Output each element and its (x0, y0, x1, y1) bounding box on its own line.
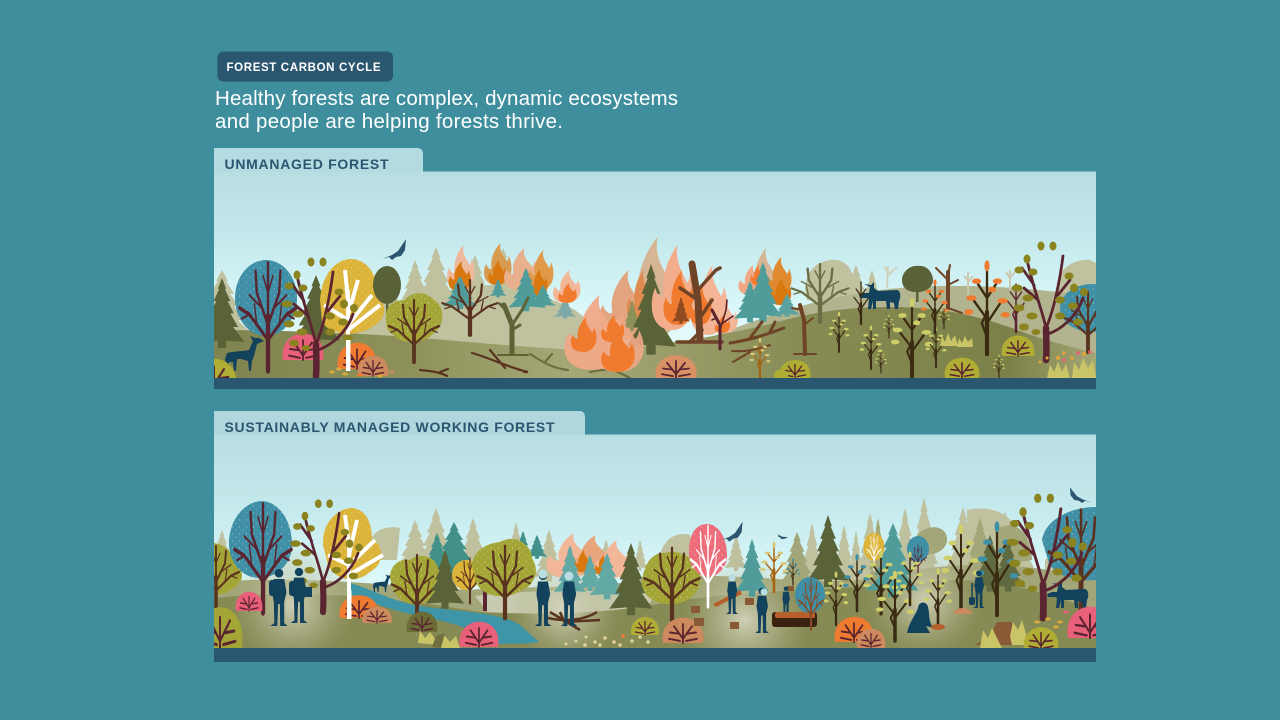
maroon trunk (483, 590, 487, 611)
right leafy tree (1007, 494, 1087, 618)
pink shrub right (1067, 607, 1113, 638)
moose (859, 282, 900, 309)
tab: unmanaged forest: UNMANAGED FOREST (224, 156, 389, 172)
log pile and worker (772, 586, 817, 627)
brown shrub (663, 618, 703, 643)
distant pale trees and blobs (209, 497, 1096, 593)
pale distant dead trees (884, 266, 1015, 295)
moose (1047, 581, 1088, 608)
fallen logs right of fire (730, 322, 784, 362)
sky (214, 434, 1096, 648)
far teal conifers (421, 522, 547, 577)
distant pale conifers (214, 247, 1096, 330)
grass tufts (940, 333, 973, 347)
teal big conifer (867, 523, 919, 597)
mid-tone hills and conifers (214, 518, 1096, 648)
badge: forest carbon cycle (218, 52, 393, 82)
flames and burning trees left (442, 243, 556, 311)
right leafy tree (1012, 242, 1088, 360)
ground bar (214, 378, 1096, 389)
lower shrubs (656, 336, 1034, 378)
birch trunk front (346, 340, 350, 371)
olive shrub (631, 617, 659, 635)
small flaming tree center (553, 270, 580, 319)
left shrub (214, 358, 236, 378)
small sapling (786, 558, 800, 585)
deer (225, 336, 264, 371)
birch trunk front (347, 590, 352, 619)
pink shrub front (460, 622, 498, 647)
controlled burn flames (546, 533, 631, 599)
background conifer under trees (297, 275, 340, 342)
olive tree center (642, 548, 700, 620)
sky (214, 172, 1096, 346)
ground bar (214, 648, 1096, 662)
slash pile (548, 612, 600, 630)
planter kneeling (907, 603, 945, 633)
burned tree (677, 264, 722, 342)
foreground ground (214, 580, 1096, 648)
heading text: Healthy forests are complex, dynamic ecosystems (215, 87, 678, 110)
mound and man with shovel (953, 571, 985, 614)
yellow birch tree (323, 508, 383, 619)
planted saplings (824, 521, 1018, 641)
bird (1070, 487, 1091, 503)
flowers and grass bottom right (1038, 350, 1096, 378)
flowers on ground (564, 634, 650, 647)
river (350, 583, 539, 644)
olive tree (386, 293, 442, 362)
worker with tablet (755, 588, 769, 633)
dark olive conifer right (807, 515, 849, 587)
heading text: and people are helping forests thrive. (215, 110, 563, 133)
dark conifer left (214, 278, 244, 348)
right blue tree (1042, 507, 1113, 610)
small deer across the river (373, 574, 392, 592)
blue tree (229, 501, 292, 612)
dark olive conifer (609, 543, 653, 615)
orange shrubs (338, 343, 388, 376)
olive shrub right (1024, 627, 1058, 650)
big flames (565, 237, 738, 372)
stumps (691, 586, 794, 629)
orange and brown shrubs (835, 617, 885, 648)
hikers (269, 568, 312, 626)
dark olive conifer (426, 550, 464, 609)
bird (382, 239, 406, 260)
fallen leaves right (1034, 610, 1069, 628)
stump with grass (975, 620, 1026, 648)
left shrub (197, 607, 243, 648)
foreground ground (214, 307, 1096, 378)
teal conifer (735, 539, 769, 597)
tab: unmanaged forest (214, 148, 423, 172)
blue small tree (795, 577, 825, 629)
grass and stump near river (418, 630, 460, 648)
dark olive tree (373, 266, 401, 313)
saplings on hill (750, 260, 1024, 378)
orange shrubs (340, 595, 392, 623)
badge: forest carbon cycle: FOREST CARBON CYCLE (226, 62, 381, 74)
worker with log (713, 574, 742, 614)
tab: sustainably managed working forest (214, 411, 585, 435)
pink shrub (283, 334, 323, 360)
dead olive tree (498, 298, 528, 355)
yellow tree small (452, 558, 484, 603)
heading text (215, 87, 678, 133)
fallen branches (420, 350, 640, 378)
yellow birch tree (320, 259, 384, 335)
pink white tree (689, 524, 727, 606)
mid dark conifers (972, 535, 1026, 592)
big olive tree (472, 539, 536, 618)
pink shrub (236, 592, 262, 611)
small orange-trunk tree (760, 542, 788, 592)
back hills (352, 285, 1096, 353)
bare brown tree (442, 280, 498, 335)
leafy maroon tree (282, 258, 358, 376)
small flaming maroon tree (712, 300, 733, 349)
flames behind teal conifers (734, 248, 800, 322)
tab: sustainably managed working forest: SUSTAINABLY MANAGED WORKING FOREST (224, 419, 555, 435)
ground glows (231, 542, 983, 685)
fire workers (535, 570, 577, 626)
blue small tree upper (907, 536, 929, 575)
fallen leaves (329, 368, 395, 378)
panel: unmanaged forest (190, 148, 1124, 390)
birds (720, 522, 788, 542)
left olive tree (193, 543, 242, 608)
panel: sustainably managed working forest (193, 411, 1113, 685)
brown tree on hill (792, 265, 962, 354)
pale clearing (475, 590, 660, 615)
blue tree right (1060, 284, 1096, 354)
small yellow birch (864, 533, 884, 570)
dark shrub (407, 612, 437, 632)
dark olive round tree (902, 266, 933, 302)
leafy maroon tree (290, 499, 363, 612)
blue tree (235, 260, 297, 370)
olive bare tree (791, 264, 849, 322)
olive tree (390, 555, 442, 625)
